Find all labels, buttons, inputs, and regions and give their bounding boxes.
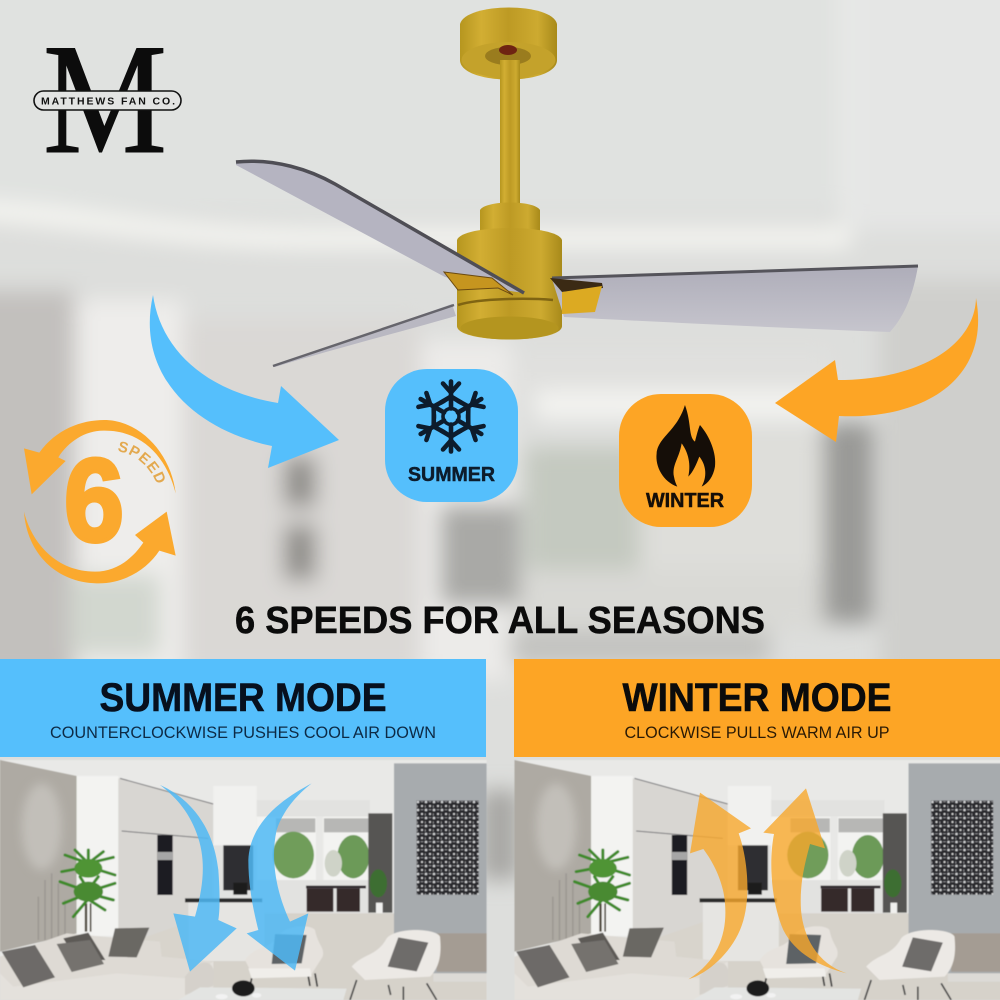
badge: winter [619, 394, 752, 527]
fan blade: right [550, 266, 918, 332]
arrow: winter air pulled up, left [688, 793, 751, 979]
winter header: CLOCKWISE PULLS WARM AIR UP [624, 723, 890, 742]
summer room photo [0, 760, 487, 1000]
fan blade: upper left [236, 161, 524, 295]
main heading: 6 SPEEDS FOR ALL SEASONS [235, 600, 765, 642]
winter header [514, 659, 1000, 757]
icon: 6 speed: 6 [64, 435, 124, 567]
icon: snowflake [416, 382, 486, 452]
label: summer: SUMMER [408, 464, 496, 486]
arrow: summer air pushed down, right [247, 783, 312, 971]
winter header: WINTER MODE [622, 676, 892, 720]
icon: flame [656, 405, 715, 487]
panel: winter mode [514, 659, 1000, 1000]
ceiling fan [236, 8, 918, 367]
badge: summer [385, 369, 518, 502]
arrow: orange winter airflow [775, 298, 978, 442]
icon: 6 speed: SPEED [118, 442, 165, 482]
fan blade: lower left [273, 304, 456, 367]
arrow: summer air pushed down, left [160, 785, 237, 972]
icon: 6 speed [24, 420, 176, 584]
arrow: winter air pulled up, right [763, 788, 847, 973]
fan downrod [500, 60, 520, 205]
winter room photo [514, 760, 1000, 1000]
fan motor housing [457, 202, 562, 340]
summer header [0, 659, 486, 757]
panel: summer mode [0, 659, 487, 1000]
fan canopy [460, 8, 557, 80]
brand logo: M [43, 12, 167, 187]
arrow: blue summer airflow [150, 295, 339, 468]
brand logo: MATTHEWS FAN CO. [41, 96, 175, 108]
label: winter: WINTER [646, 490, 725, 512]
summer header: SUMMER MODE [100, 676, 386, 720]
summer header: COUNTERCLOCKWISE PUSHES COOL AIR DOWN [50, 723, 436, 742]
